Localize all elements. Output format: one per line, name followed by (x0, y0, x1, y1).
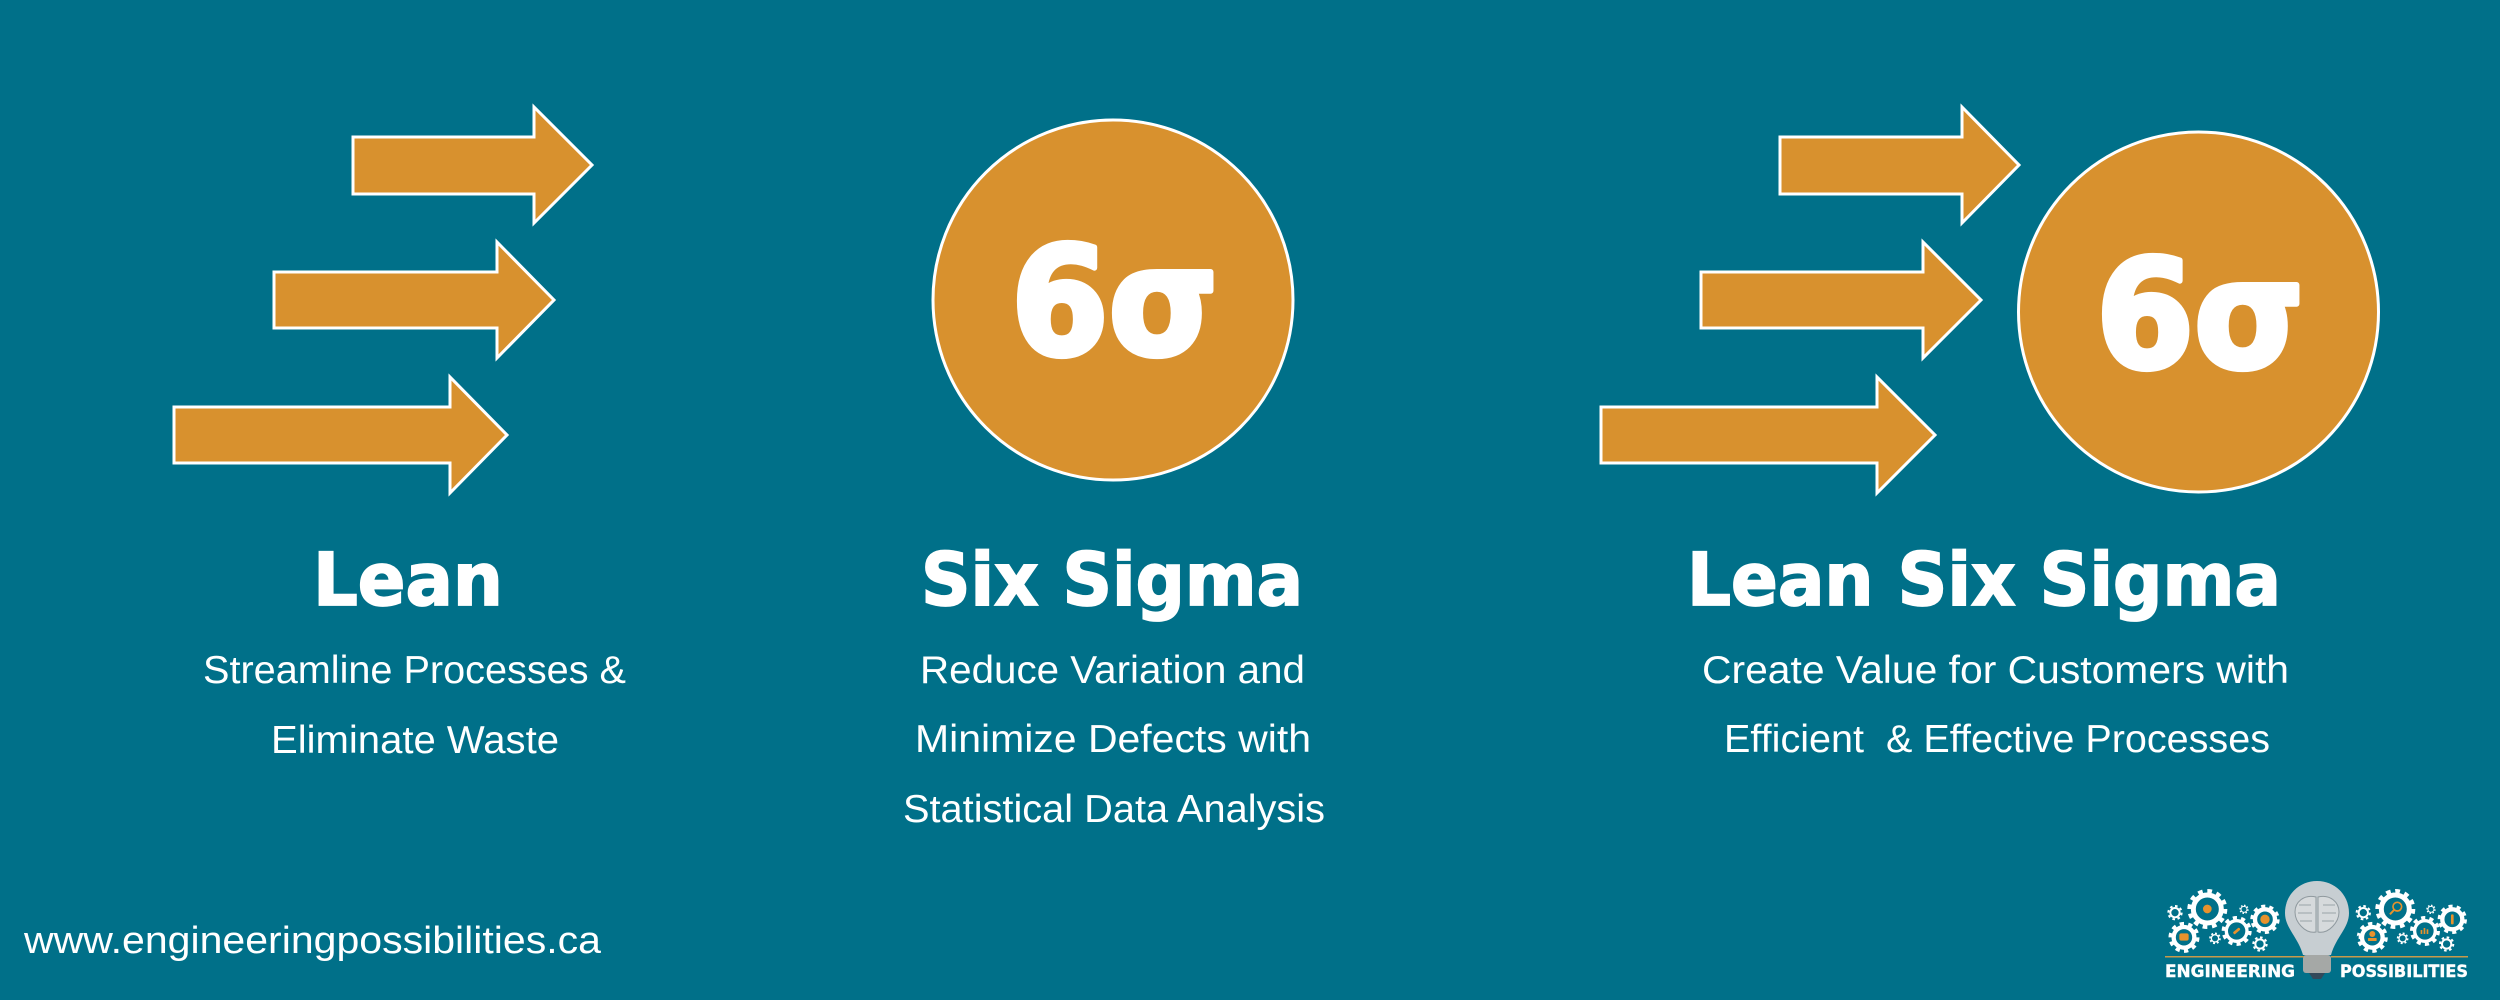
icon: three Lean arrows (174, 107, 592, 493)
text: Six Sigma description (903, 649, 1325, 831)
arrow: bottom (1601, 377, 1935, 493)
text: Lean description (203, 649, 626, 762)
text: Lean Six Sigma description: Create Value for Customers with (1702, 649, 2289, 692)
logo text (2165, 962, 2468, 982)
text: Six Sigma description: Statistical Data Analysis (903, 788, 1325, 831)
logo text: ENGINEERING (2165, 962, 2295, 982)
heading: Six Sigma: Six Sigma (921, 538, 1303, 623)
arrow: middle (274, 242, 554, 358)
heading: Lean Six Sigma: Lean Six Sigma (1687, 538, 2281, 623)
icon: six sigma circle (933, 120, 1293, 480)
icon: right gears (2357, 891, 2465, 951)
logo: Engineering Possibilities (2165, 881, 2468, 982)
panel: Lean Six Sigma (1601, 107, 2378, 761)
arrow: bottom (174, 377, 507, 493)
arrow: middle (1701, 242, 1981, 358)
text: Six Sigma description: Minimize Defects with (915, 718, 1311, 761)
text: Lean Six Sigma description (1702, 649, 2289, 761)
logo text: POSSIBILITIES (2340, 962, 2468, 982)
text: Lean description: Eliminate Waste (271, 719, 559, 762)
panel: Lean (174, 107, 626, 762)
panel: Six Sigma (903, 120, 1325, 831)
icon: arrows into circle (1601, 107, 2378, 493)
icon: six sigma circle: 6σ (1011, 216, 1218, 390)
text: Six Sigma description: Reduce Variation and (920, 649, 1305, 692)
text: Lean description: Streamline Processes & (203, 649, 626, 692)
icon: left gears (2168, 891, 2278, 951)
arrow: top (353, 107, 592, 223)
text: Lean Six Sigma description: Efficient & Effective Processes (1724, 718, 2270, 761)
circle: six sigma (2018, 132, 2378, 492)
website url: www.engineeringpossibilities.ca (23, 920, 602, 962)
circle: six sigma: 6σ (2096, 229, 2304, 403)
arrow: top (1780, 107, 2019, 223)
heading: Lean: Lean (313, 538, 503, 623)
icon: light bulb with brain (2285, 881, 2349, 979)
divider line (2165, 956, 2468, 958)
